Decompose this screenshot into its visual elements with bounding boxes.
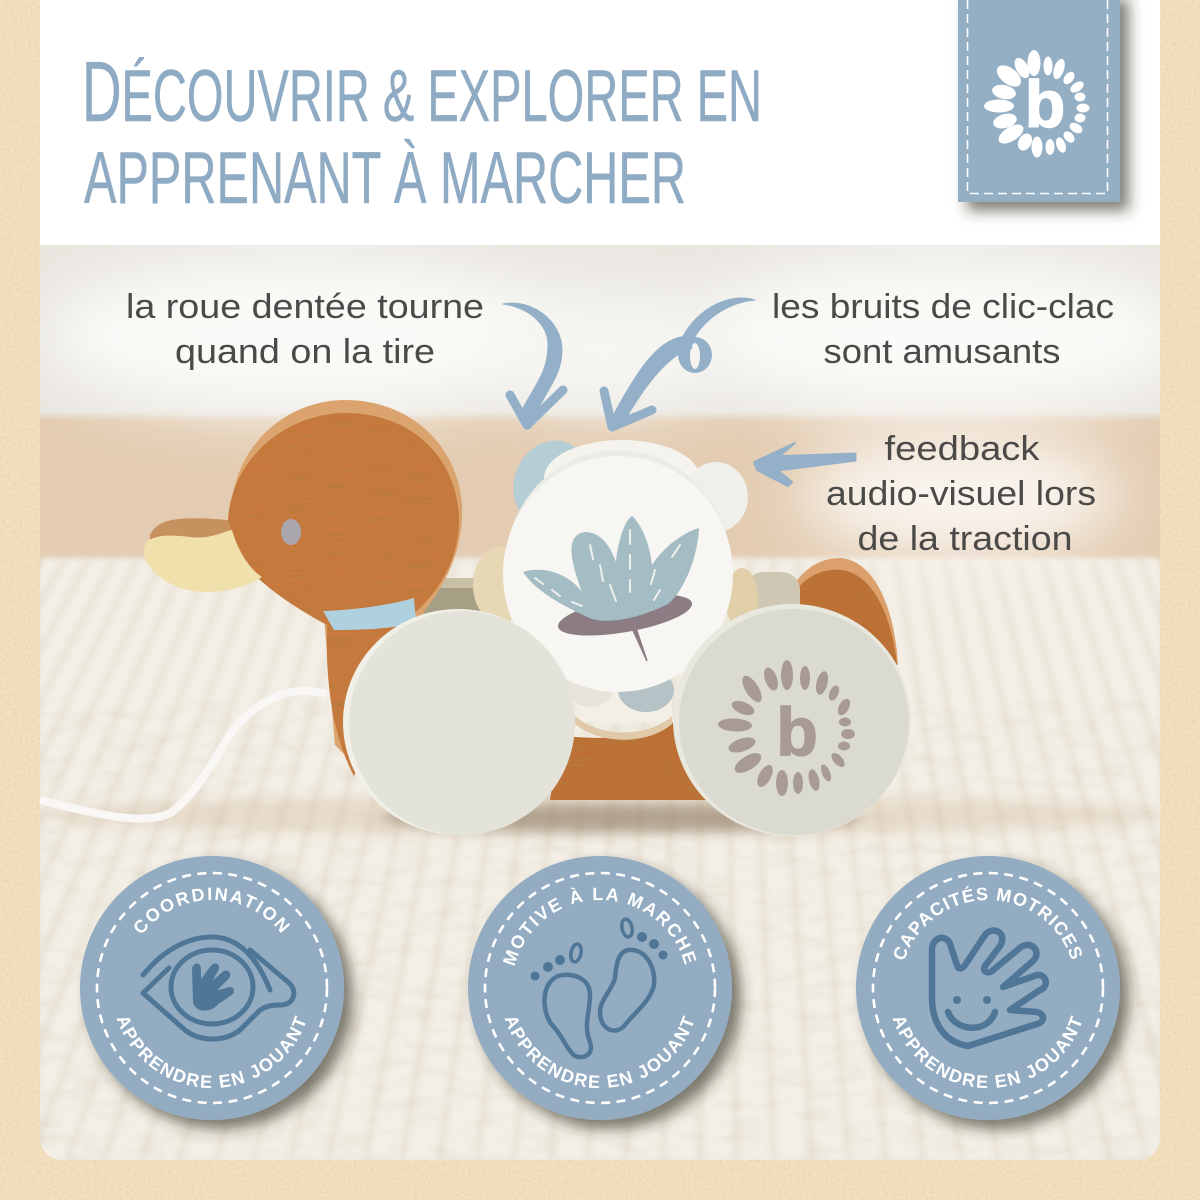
arrow: to toy from feedback — [754, 443, 856, 486]
left big wheel — [343, 609, 575, 835]
text haze right — [690, 257, 1190, 413]
pull rope — [40, 691, 326, 819]
contact shadow under toy — [380, 804, 860, 832]
icon: footprints — [530, 918, 668, 1057]
text haze left — [45, 257, 565, 413]
badge: coordination — [78, 854, 363, 1139]
tail — [784, 558, 898, 665]
arrow: to clack sound — [604, 298, 755, 427]
callout: click clack sounds: sont amusants — [824, 333, 1060, 371]
white header panel — [40, 0, 1160, 245]
photo panel: carpet and floor — [0, 245, 1200, 1160]
callout: click clack sounds — [772, 288, 1114, 371]
arrow: to gear wheel — [503, 303, 563, 428]
title: DÉCOUVRIR & EXPLORER EN — [82, 45, 762, 140]
brand tag — [958, 0, 1120, 202]
icon: smiling hand — [932, 931, 1046, 1046]
badge: coordination: APPRENDRE EN JOUANT — [116, 1015, 306, 1088]
callout: feedback — [826, 430, 1096, 558]
right big wheel — [673, 604, 911, 836]
callout: gear wheel: quand on la tire — [175, 333, 435, 371]
badge: motive a la marche: APPRENDRE EN JOUANT — [504, 1015, 694, 1088]
badge: capacites motrices — [854, 854, 1139, 1140]
title: APPRENANT À MARCHER — [84, 138, 686, 219]
callout: feedback: audio-visuel lors — [826, 475, 1096, 513]
callout: click clack sounds: les bruits de clic-clac — [772, 288, 1114, 326]
callout: gear wheel: la roue dentée tourne — [126, 288, 484, 326]
flower — [523, 516, 699, 661]
callout: feedback: feedback — [884, 430, 1041, 468]
toy duck — [144, 400, 911, 836]
badge: capacites motrices: CAPACITÉS MOTRICES — [894, 886, 1082, 960]
icon: eye with hand — [143, 937, 294, 1039]
text haze center — [490, 290, 730, 410]
icon: brand logo white — [984, 50, 1090, 158]
hollow axle rings — [415, 572, 800, 722]
badge: capacites motrices: APPRENDRE EN JOUANT — [892, 1015, 1082, 1088]
center wheel with flower — [503, 450, 733, 692]
badge: motive a la marche — [467, 854, 752, 1140]
badge: motive a la marche: MOTIVE À LA MARCHE — [502, 888, 696, 966]
text haze feedback — [800, 433, 1120, 557]
blue collar — [323, 598, 416, 630]
beak — [144, 518, 262, 592]
callout: feedback: de la traction — [858, 520, 1072, 558]
icon: brand logo on wheel: b — [776, 694, 818, 770]
head and body — [228, 400, 462, 776]
title — [82, 45, 762, 219]
body base — [550, 722, 720, 800]
callout: gear wheel — [126, 288, 484, 371]
gear petals behind — [473, 430, 758, 712]
icon: brand logo on wheel — [718, 660, 855, 796]
icon: brand logo white: b — [1025, 67, 1065, 141]
badge: coordination: COORDINATION — [134, 888, 290, 933]
